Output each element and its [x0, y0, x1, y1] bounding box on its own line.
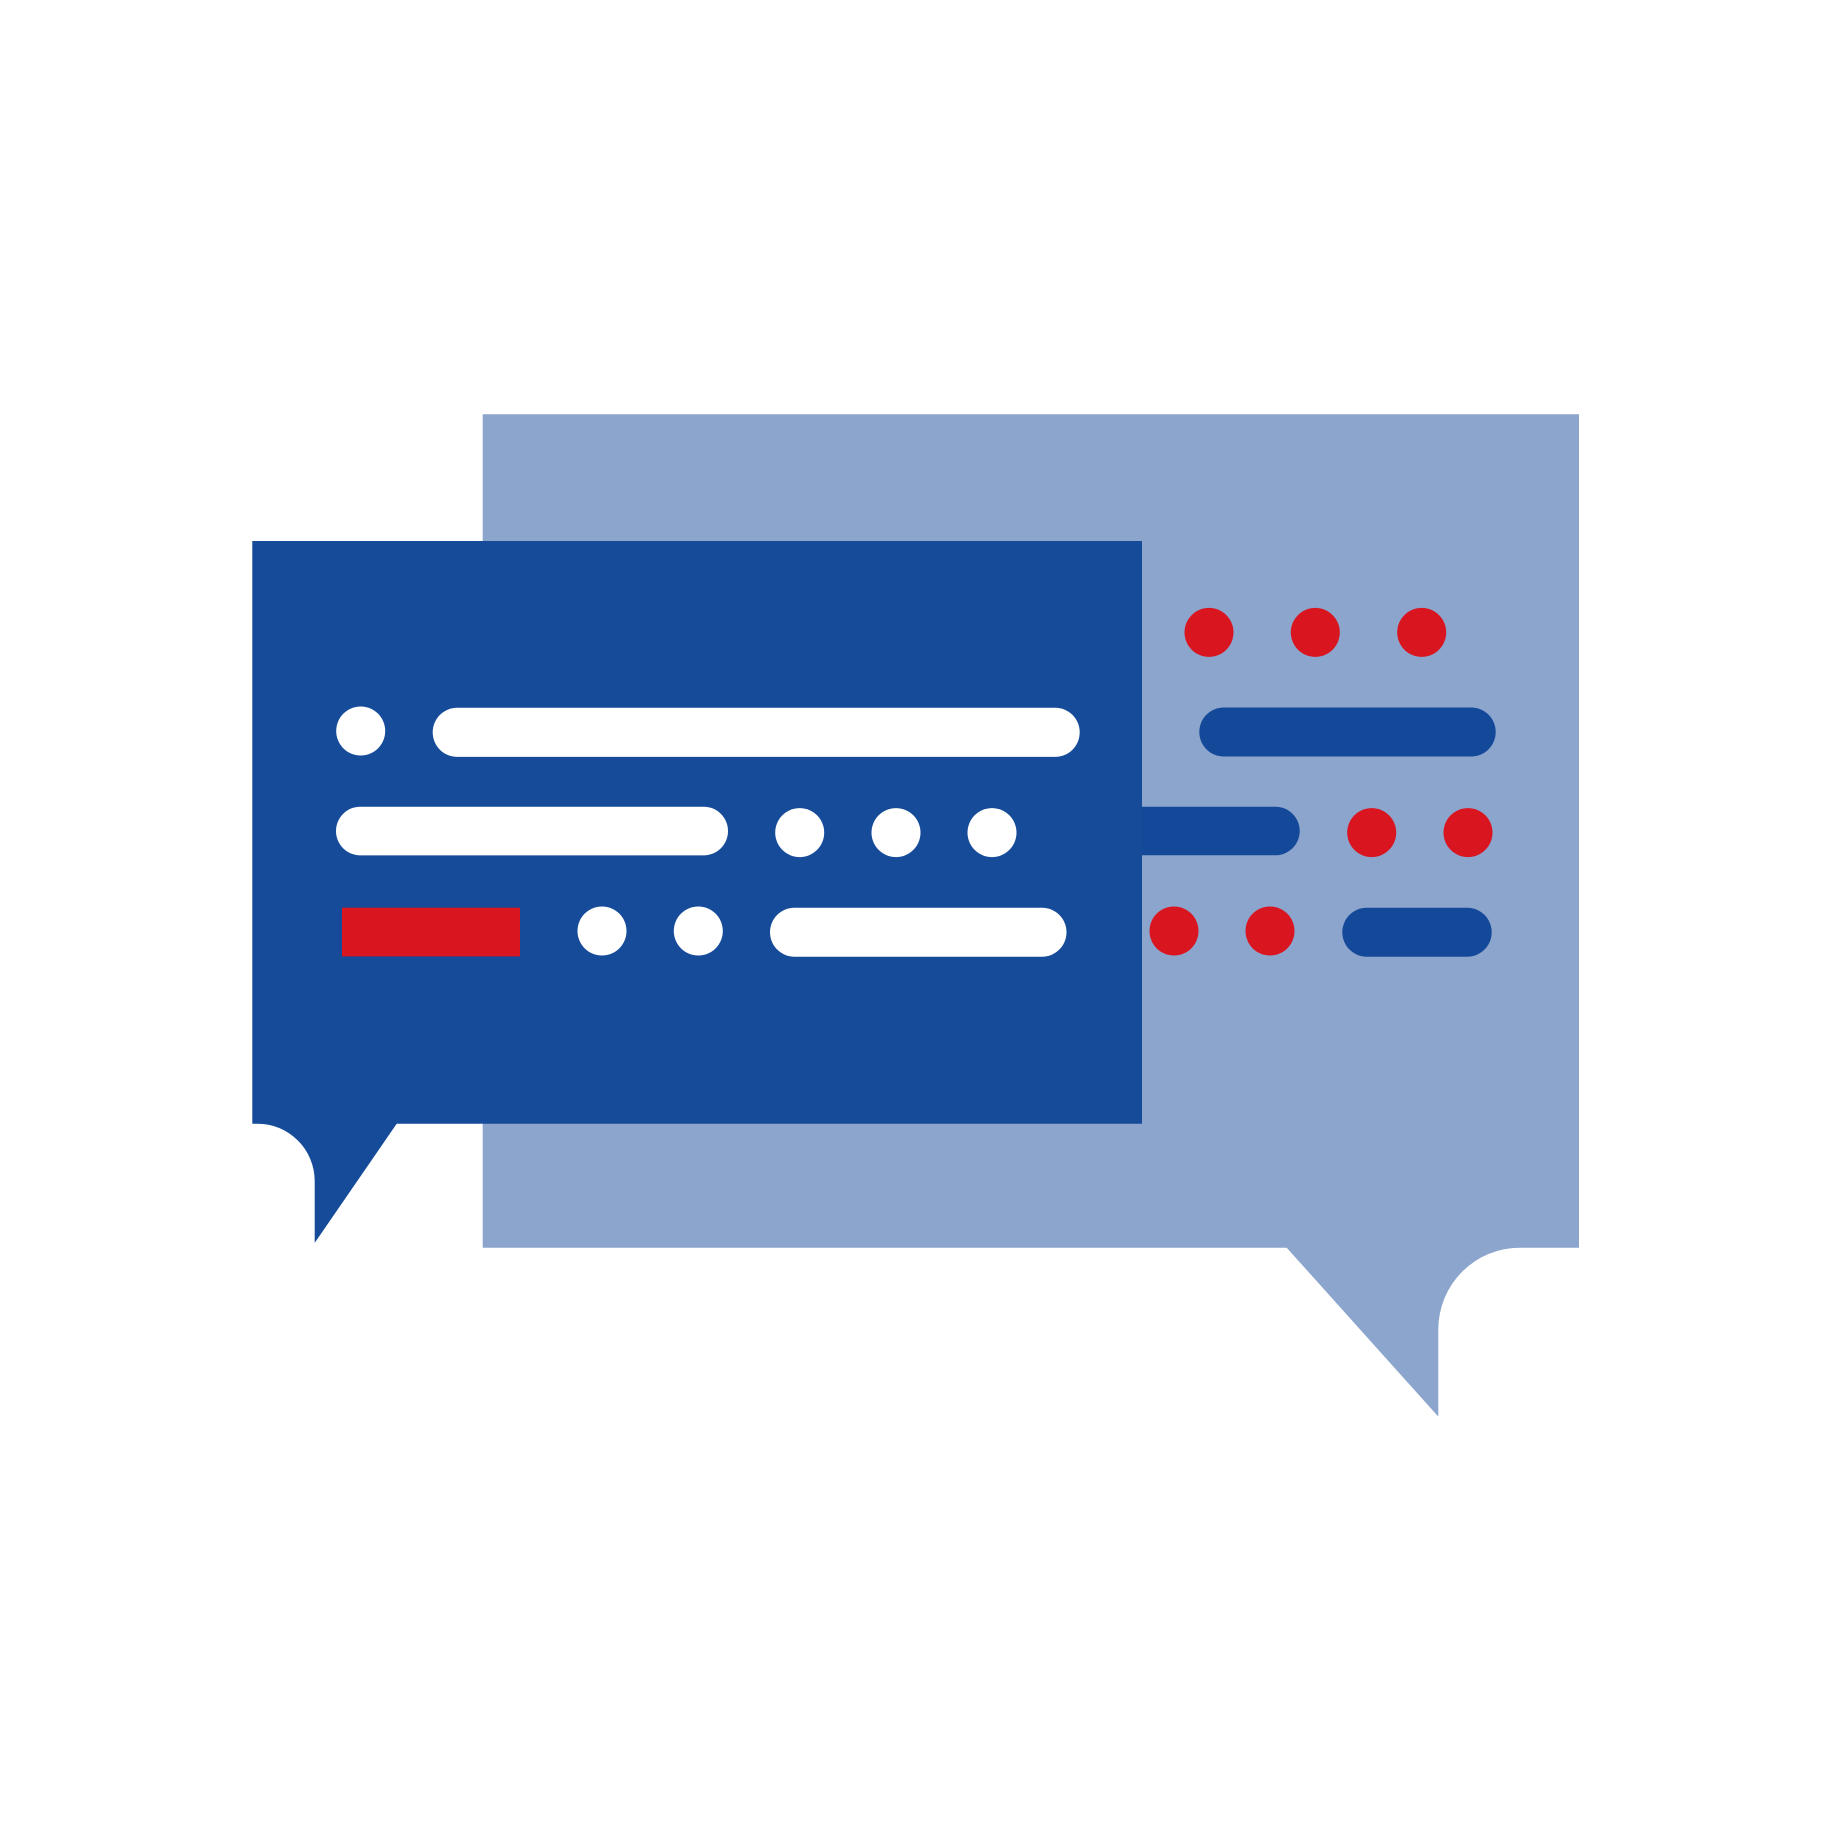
row: red dots top right [1184, 608, 1446, 657]
row: white message line two [336, 807, 1016, 857]
pill: dark blue line right [1199, 708, 1496, 756]
row: white message line one [336, 706, 1080, 757]
row: red dots with dark blue pill [1150, 906, 1492, 957]
row: dark bar extending from bubble with red dots [1142, 807, 1492, 857]
row: white message line three with red highlight [342, 906, 1066, 957]
panel: dark blue speech bubble [252, 541, 1142, 1243]
panel: light blue speech bubble [483, 414, 1579, 1417]
